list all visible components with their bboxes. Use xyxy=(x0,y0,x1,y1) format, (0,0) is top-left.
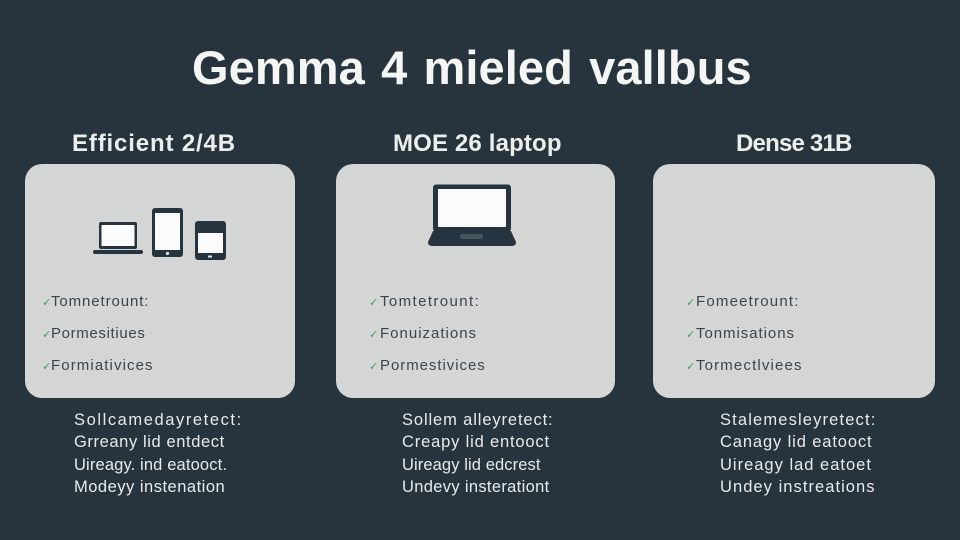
title: Gemma 4 mieled vallbus xyxy=(192,41,752,94)
list: laptop features: ✓ xyxy=(369,361,378,373)
panel: efficient xyxy=(25,164,295,398)
list: dense features: Tormectlviees xyxy=(696,357,803,374)
panel: dense xyxy=(653,164,935,398)
text block: column 2 description: Sollem alleyretect: xyxy=(402,411,554,429)
text block: column 1 description xyxy=(74,411,243,496)
list: laptop features: Fonuizations xyxy=(380,325,477,342)
list: efficient features: ✓ xyxy=(42,297,51,309)
list: efficient features: Formiativices xyxy=(51,357,154,374)
list: laptop features: Tomtetrount: xyxy=(380,293,480,310)
list: efficient features: ✓ xyxy=(42,329,51,341)
text block: column 1 description: Modeyy instenation xyxy=(74,478,225,496)
list: laptop features xyxy=(369,293,486,374)
list: efficient features xyxy=(42,293,154,374)
text block: column 1 description: Grreany lid entdect xyxy=(74,433,225,451)
text block: column 1 description: Uireagy. ind eatooct. xyxy=(74,456,227,474)
list: laptop features: Pormestivices xyxy=(380,357,486,374)
heading: column 3: Dense 31B xyxy=(736,130,852,157)
panel: laptop xyxy=(336,164,615,398)
list: dense features: ✓ xyxy=(686,329,695,341)
text block: column 1 description: Sollcamedayretect: xyxy=(74,411,243,429)
text block: column 3 description: Uireagy lad eatoet xyxy=(720,456,872,474)
list: laptop features: ✓ xyxy=(369,297,378,309)
icon: three devices xyxy=(93,208,226,260)
list: dense features: ✓ xyxy=(686,361,695,373)
list: dense features: Fomeetrount: xyxy=(696,293,800,310)
text block: column 3 description: Stalemesleyretect: xyxy=(720,411,876,429)
list: laptop features: ✓ xyxy=(369,329,378,341)
text block: column 3 description: Undey instreations xyxy=(720,478,876,496)
list: dense features: ✓ xyxy=(686,297,695,309)
text block: column 2 description: Creapy lid entooct xyxy=(402,433,550,451)
text block: column 3 description xyxy=(720,411,876,496)
list: efficient features: ✓ xyxy=(42,361,51,373)
list: efficient features: Pormesitiues xyxy=(51,325,146,342)
heading: column 2: MOE 26 laptop xyxy=(393,130,562,157)
list: dense features xyxy=(686,293,803,374)
text block: column 2 description: Undevy insterationt xyxy=(402,478,550,496)
list: dense features: Tonmisations xyxy=(696,325,795,342)
list: efficient features: Tomnetrount: xyxy=(51,293,149,310)
text block: column 2 description: Uireagy lid edcrest xyxy=(402,456,541,474)
heading: column 1: Efficient 2/4B xyxy=(72,130,236,157)
text block: column 2 description xyxy=(402,411,554,496)
icon: laptop xyxy=(428,184,516,246)
text block: column 3 description: Canagy lid eatooct xyxy=(720,433,873,451)
